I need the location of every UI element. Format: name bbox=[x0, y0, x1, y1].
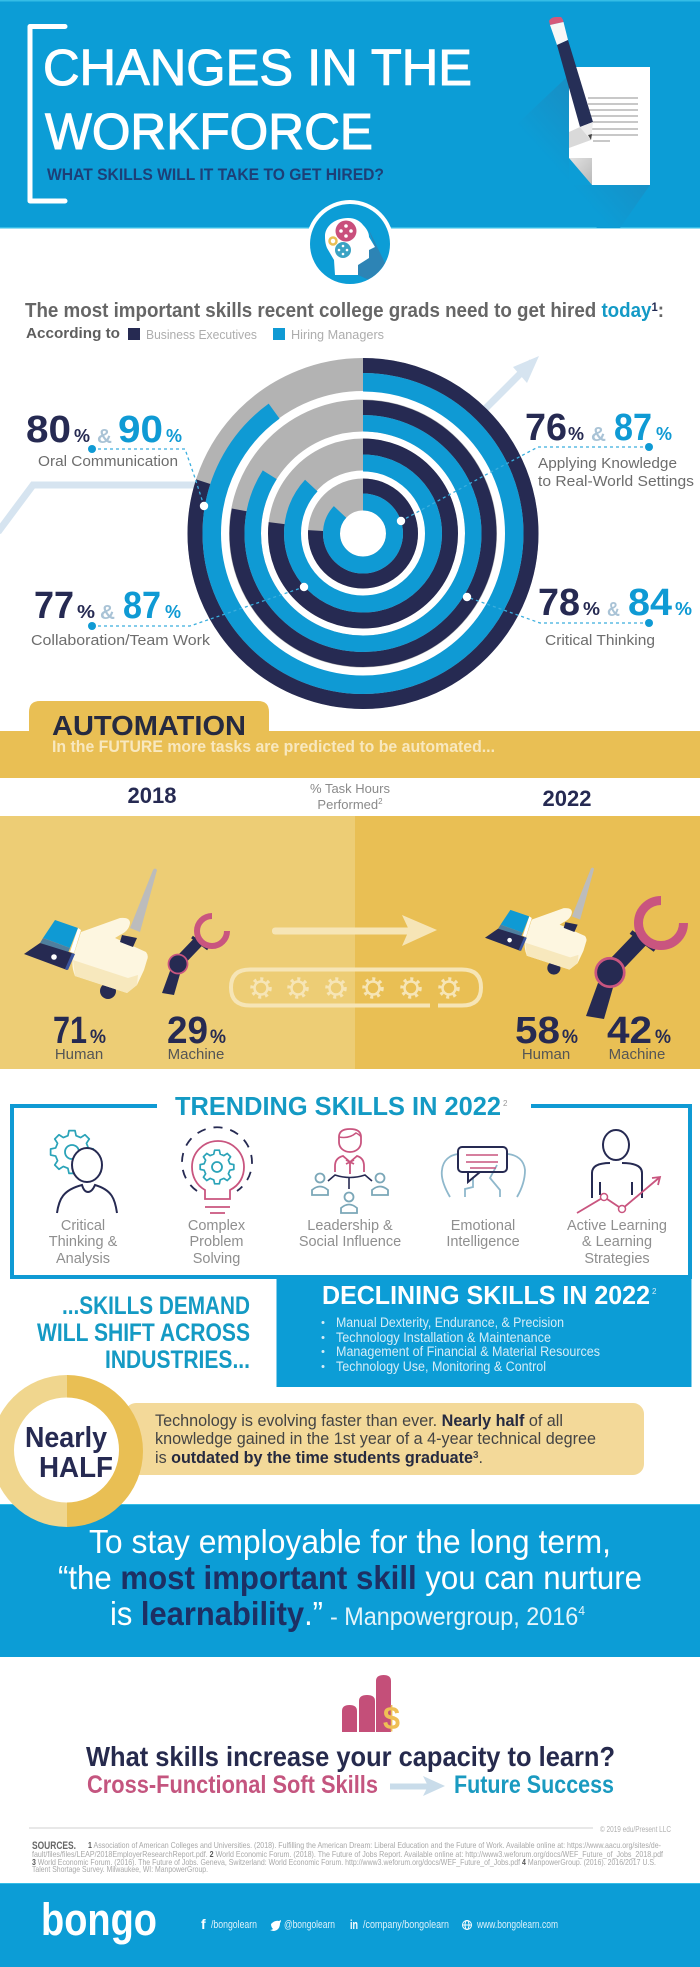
stat: 42% machine bbox=[607, 1010, 671, 1063]
nearly half badge bbox=[0, 1375, 143, 1527]
automation banner: In the FUTURE more tasks are predicted to be automated... bbox=[52, 738, 495, 756]
icon: head with gears bbox=[306, 200, 394, 288]
icon: human hand with screwdriver 2018 bbox=[24, 868, 157, 999]
ring: applying knowledge bbox=[316, 486, 410, 581]
subtitle: WHAT SKILLS WILL IT TAKE TO GET HIRED? bbox=[47, 166, 384, 184]
quote band: is learnability.” bbox=[110, 1595, 323, 1632]
stat: 71% human: Human bbox=[55, 1046, 103, 1063]
nearly half badge: HALF bbox=[39, 1452, 113, 1484]
leader line endpoints bbox=[88, 443, 653, 630]
icon: critical thinking bbox=[51, 1131, 117, 1213]
header band bbox=[0, 0, 700, 228]
stat: 29% machine bbox=[167, 1010, 226, 1063]
year labels bbox=[128, 781, 591, 812]
cross-functional soft skills: Cross-Functional Soft Skills bbox=[87, 1771, 378, 1799]
title: CHANGES IN THE bbox=[43, 39, 472, 96]
social links: /company/bongolearn bbox=[363, 1919, 449, 1931]
declining skills panel: Technology Use, Monitoring & Control bbox=[336, 1359, 546, 1374]
stat: 42% machine: 42 bbox=[607, 1010, 652, 1052]
icon: human hand with screwdriver 2022 bbox=[485, 868, 594, 975]
sources: SOURCES. bbox=[32, 1840, 76, 1852]
callout: critical thinking: 84 bbox=[628, 582, 672, 624]
callout: critical thinking: % bbox=[583, 599, 600, 619]
callout: applying knowledge: 87 bbox=[614, 407, 652, 449]
declining skills panel: 2 bbox=[652, 1287, 657, 1296]
icon: conveyor with gears bbox=[231, 970, 481, 1006]
callout: applying knowledge bbox=[525, 407, 694, 490]
ring: collaboration bbox=[276, 446, 450, 620]
trending skill labels: Analysis bbox=[56, 1251, 110, 1267]
icon: emotional intelligence bbox=[442, 1147, 525, 1197]
trending skill labels: Problem bbox=[190, 1234, 244, 1250]
bongo logo: bongo bbox=[41, 1894, 157, 1945]
declining skills panel: Manual Dexterity, Endurance, & Precision bbox=[336, 1315, 564, 1330]
trending skill labels: Solving bbox=[193, 1251, 240, 1267]
callout leader lines bbox=[92, 447, 649, 626]
sources: Talent Shortage Survey. Milwaukee, WI: ManpowerGroup. bbox=[32, 1864, 208, 1874]
year labels: % Task Hours bbox=[310, 781, 390, 796]
icon: twitter bird bbox=[270, 1920, 281, 1931]
nearly half text bar: 3 bbox=[473, 1450, 479, 1461]
skills demand statement: WILL SHIFT ACROSS bbox=[37, 1319, 250, 1347]
icon: robot arm 2022 bbox=[586, 900, 684, 1019]
icon: pencil on paper bbox=[513, 17, 650, 228]
callout: applying knowledge: 76 bbox=[525, 407, 567, 449]
skills demand statement bbox=[37, 1292, 250, 1374]
title: WORKFORCE bbox=[45, 103, 373, 160]
social links: /bongolearn bbox=[211, 1919, 257, 1931]
year labels: 2018 bbox=[128, 783, 176, 808]
trending skill labels: Emotional bbox=[451, 1218, 515, 1234]
legend bbox=[26, 325, 384, 342]
quote band: “the most important skill you can nurture bbox=[58, 1559, 642, 1596]
nearly half badge: Nearly bbox=[25, 1422, 107, 1454]
arrow bbox=[390, 1776, 445, 1796]
icon: robot arm 2018 bbox=[162, 916, 227, 995]
callout: applying knowledge: % bbox=[656, 424, 672, 444]
social links: f bbox=[201, 1916, 206, 1932]
stat: 71% human bbox=[53, 1010, 106, 1063]
automation panel background bbox=[0, 816, 700, 1069]
ring: critical thinking bbox=[237, 408, 489, 660]
stat: 29% machine: Machine bbox=[168, 1046, 224, 1063]
quote band bbox=[0, 1504, 700, 1657]
trending skill labels: Thinking & bbox=[49, 1234, 118, 1250]
automation banner: AUTOMATION bbox=[52, 710, 246, 741]
trending skills panel border bbox=[12, 1106, 690, 1277]
social links: @bongolearn bbox=[284, 1919, 335, 1931]
title bbox=[43, 39, 472, 160]
year labels: Performed bbox=[317, 797, 378, 812]
legend: Business Executives bbox=[146, 327, 257, 342]
icon: bar chart with dollar bbox=[342, 1675, 400, 1736]
trending skill labels bbox=[49, 1218, 667, 1267]
year labels: 2 bbox=[378, 797, 383, 806]
nearly half text bar: . bbox=[479, 1449, 483, 1467]
callout: oral communication bbox=[26, 409, 182, 470]
trending skill labels: Complex bbox=[188, 1218, 246, 1234]
trending skill labels: Intelligence bbox=[446, 1234, 520, 1250]
trending skill labels: & Learning bbox=[582, 1234, 652, 1250]
declining skills panel: DECLINING SKILLS IN 2022 bbox=[322, 1282, 650, 1310]
callout: collaboration: 87 bbox=[123, 585, 161, 627]
stat: 71% human: % bbox=[90, 1027, 106, 1048]
social links: in bbox=[350, 1917, 358, 1932]
callout: oral communication: % bbox=[74, 426, 90, 446]
trending skill labels: Active Learning bbox=[567, 1218, 667, 1234]
callout: oral communication: & bbox=[97, 426, 112, 448]
icon: bar chart with dollar: $ bbox=[383, 1700, 400, 1736]
trending skills heading: TRENDING SKILLS IN 2022 bbox=[175, 1093, 501, 1121]
footer band bbox=[0, 1883, 700, 1967]
nearly half text bar: knowledge gained in the 1st year of a 4-year technical degree bbox=[155, 1430, 596, 1448]
stat: 58% human: 58 bbox=[515, 1010, 560, 1052]
callout: collaboration: % bbox=[77, 602, 95, 622]
callout: collaboration: 77 bbox=[34, 585, 74, 627]
trending skill labels: Leadership & bbox=[307, 1218, 393, 1234]
icon: active learning bbox=[577, 1130, 660, 1213]
sources bbox=[32, 1840, 664, 1874]
stat: 29% machine: % bbox=[210, 1027, 226, 1048]
closing question: What skills increase your capacity to learn? bbox=[86, 1741, 615, 1772]
callout: critical thinking: & bbox=[607, 599, 620, 621]
declining skills panel bbox=[276, 1277, 692, 1387]
future success: Future Success bbox=[454, 1771, 614, 1799]
callout: applying knowledge: Applying Knowledge bbox=[538, 455, 677, 472]
quote band: 4 bbox=[578, 1603, 585, 1618]
sources: 3 World Economic Forum. (2016). The Future of Jobs. Geneva, Switzerland: World Economic Forum. http://www3.weforum.org/docs/WEF_Future_of_Jobs.pdf 4 ManpowerGroup. (2016). 2016/2017 U.S. bbox=[32, 1857, 656, 1867]
callout: critical thinking: Critical Thinking bbox=[545, 632, 655, 649]
automation banner bbox=[0, 701, 700, 778]
intro heading: The most important skills recent college grads need to get hired today bbox=[25, 300, 655, 322]
stat: 42% machine: Machine bbox=[609, 1046, 665, 1063]
skills demand statement: INDUSTRIES... bbox=[105, 1346, 250, 1374]
icon: progress arrow bbox=[272, 915, 437, 946]
callout: critical thinking bbox=[538, 582, 692, 649]
icon: complex problem solving bbox=[182, 1127, 252, 1213]
ring: oral communication bbox=[195, 366, 531, 702]
callout: applying knowledge: to Real-World Settings bbox=[538, 473, 694, 490]
year labels: 2022 bbox=[543, 786, 591, 811]
social links bbox=[201, 1916, 558, 1932]
title bracket bbox=[30, 26, 65, 201]
copyright rule: © 2019 edu/Present LLC bbox=[600, 1825, 671, 1834]
stat: 58% human: Human bbox=[522, 1046, 570, 1063]
trending skill labels: Social Influence bbox=[299, 1234, 401, 1250]
stat: 58% human bbox=[515, 1010, 578, 1063]
nearly half text bar: is outdated by the time students graduate bbox=[155, 1449, 476, 1467]
social links: www.bongolearn.com bbox=[476, 1919, 558, 1931]
intro heading: 1 bbox=[651, 300, 658, 314]
quote band: To stay employable for the long term, bbox=[89, 1523, 611, 1560]
declining skills panel: Technology Installation & Maintenance bbox=[336, 1330, 551, 1345]
decorative growth arrow behind chart bbox=[0, 356, 539, 532]
stat: 58% human: % bbox=[562, 1027, 578, 1048]
skills demand statement: ...SKILLS DEMAND bbox=[62, 1292, 250, 1320]
callout: critical thinking: 78 bbox=[538, 582, 580, 624]
callout: applying knowledge: % bbox=[568, 424, 584, 444]
callout: collaboration: & bbox=[100, 602, 115, 624]
trending skill labels: Critical bbox=[61, 1218, 105, 1234]
callout: collaboration bbox=[31, 585, 211, 649]
callout: oral communication: 90 bbox=[118, 409, 163, 451]
stat: 42% machine: % bbox=[655, 1027, 671, 1048]
callout: critical thinking: % bbox=[675, 599, 692, 619]
callout: oral communication: % bbox=[166, 426, 182, 446]
radial bar chart bbox=[195, 366, 531, 702]
callout: applying knowledge: & bbox=[591, 424, 606, 446]
trending skill labels: Strategies bbox=[584, 1251, 650, 1267]
quote band: - Manpowergroup, 2016 bbox=[330, 1603, 595, 1631]
legend: Hiring Managers bbox=[291, 327, 384, 342]
legend: According to bbox=[26, 325, 120, 342]
trending skills heading: 2 bbox=[503, 1099, 508, 1108]
callout: oral communication: Oral Communication bbox=[38, 453, 178, 470]
declining skills panel: Management of Financial & Material Resources bbox=[336, 1344, 600, 1359]
icon: globe bbox=[462, 1920, 472, 1930]
callout: oral communication: 80 bbox=[26, 409, 71, 451]
stat: 71% human: 71 bbox=[53, 1010, 87, 1052]
callout: collaboration: Collaboration/Team Work bbox=[31, 632, 211, 649]
nearly half text bar: Technology is evolving faster than ever. Nearly half of all bbox=[155, 1412, 563, 1430]
stat: 29% machine: 29 bbox=[167, 1010, 208, 1052]
callout: collaboration: % bbox=[165, 602, 181, 622]
intro heading: : bbox=[658, 300, 664, 322]
icon: leadership bbox=[312, 1129, 388, 1213]
nearly half text bar bbox=[125, 1403, 644, 1475]
